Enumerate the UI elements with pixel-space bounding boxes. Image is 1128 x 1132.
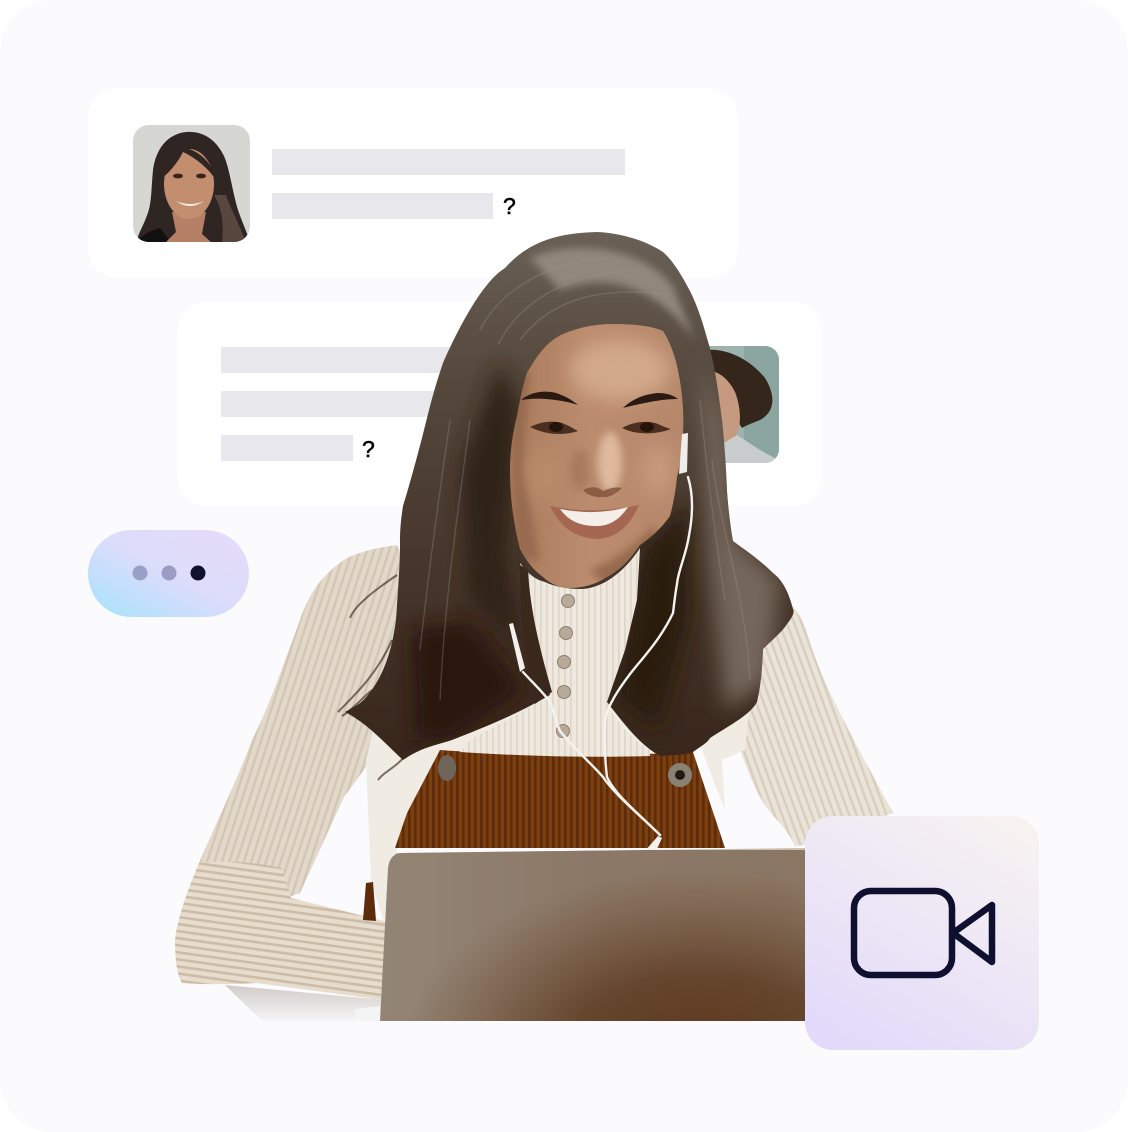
- earbud right: [679, 433, 688, 474]
- laptop shading: [431, 888, 805, 1021]
- hair shading: [410, 620, 525, 740]
- cable end: [645, 836, 662, 851]
- table shadow: [225, 985, 385, 1021]
- hair silhouette: [330, 225, 810, 765]
- eyebrows: [521, 392, 678, 408]
- face highlights: [570, 340, 670, 400]
- typing dots: [132, 566, 206, 580]
- shirt torso: [366, 700, 750, 922]
- overall lower left sliver: [363, 882, 376, 921]
- white cup: [354, 1006, 380, 1021]
- hair strand over chest: [520, 565, 552, 704]
- nose: [583, 487, 622, 497]
- text placeholder bars: [221, 347, 461, 461]
- eyes: [530, 422, 671, 434]
- laptop: [378, 848, 808, 1025]
- sweater left upper arm: [175, 545, 420, 940]
- question mark: ?: [362, 436, 375, 462]
- wispy hair ends: [338, 575, 410, 780]
- earbud left: [509, 623, 525, 672]
- avatar: smiling woman: [133, 125, 250, 243]
- corduroy overalls: [395, 750, 725, 848]
- sweater forearm: [175, 862, 388, 1000]
- turtleneck chest panel: [460, 548, 650, 757]
- icon: video camera: [854, 891, 992, 975]
- sweater right arm: [715, 590, 893, 846]
- main photo: woman at laptop: [175, 225, 893, 1025]
- panel: second question card: [221, 346, 779, 463]
- video call tile: [805, 816, 1039, 1050]
- buttons: [556, 594, 574, 738]
- text placeholder bars: [272, 149, 625, 219]
- panel: first question card: [133, 125, 625, 242]
- infographic scene: [88, 125, 1039, 1050]
- avatar: curly-haired woman: [709, 346, 779, 463]
- overall clasps: [438, 755, 692, 787]
- smile: [550, 505, 639, 539]
- earphone cable: [523, 477, 692, 835]
- typing indicator bubble: [88, 530, 249, 617]
- question mark: ?: [503, 193, 516, 219]
- face: [505, 320, 690, 592]
